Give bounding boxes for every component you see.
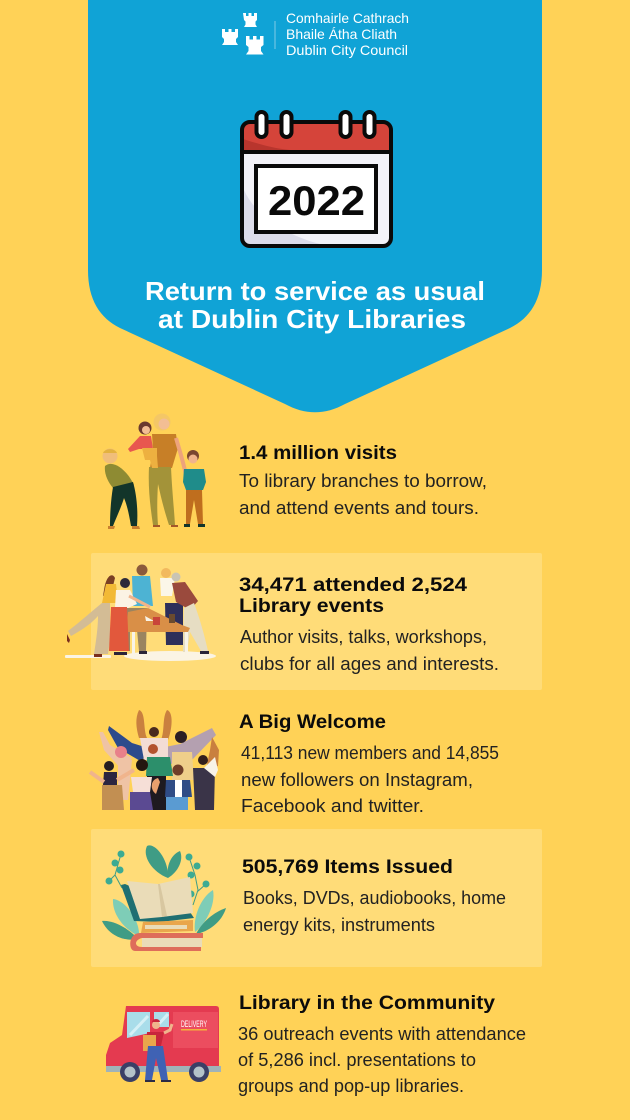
text: items issued: 505,769 Items Issued xyxy=(242,857,453,878)
text: library in the community: of 5,286 incl. presentations to xyxy=(238,1050,476,1070)
illustration: delivery van: DELIVERY xyxy=(181,1019,207,1029)
standing woman in yellow xyxy=(103,575,115,596)
text: library events xyxy=(239,575,499,674)
logo divider xyxy=(274,21,276,49)
title xyxy=(145,276,485,334)
text: a big welcome: new followers on Instagram, xyxy=(241,770,473,790)
illustration: cheering crowd xyxy=(90,710,219,810)
panel: blue header xyxy=(88,0,542,412)
woman in white xyxy=(161,568,171,578)
text: library events: clubs for all ages and interests. xyxy=(240,654,499,674)
text: library in the community: Library in the Community xyxy=(239,993,495,1014)
title: at Dublin City Libraries xyxy=(158,304,466,334)
old man xyxy=(102,448,118,464)
title: Return to service as usual xyxy=(145,276,485,306)
logo text: Bhaile Átha Cliath xyxy=(286,26,397,42)
table xyxy=(126,608,190,632)
illustration: books and plants xyxy=(102,845,226,951)
logo text: Dublin City Council xyxy=(286,42,408,58)
text: 1.4 million visits xyxy=(239,443,487,518)
text: items issued: Books, DVDs, audiobooks, home xyxy=(243,888,506,908)
text: items issued xyxy=(242,857,506,935)
text: a big welcome: Facebook and twitter. xyxy=(241,796,424,816)
boy xyxy=(187,450,199,462)
logo: Dublin City Council xyxy=(222,10,409,58)
text: library events: Author visits, talks, workshops, xyxy=(240,627,487,647)
illustration: people at table xyxy=(65,564,216,661)
man in blue xyxy=(136,564,148,576)
text: library in the community: groups and pop-up libraries. xyxy=(238,1076,464,1096)
logo text: Comhairle Cathrach xyxy=(286,10,409,26)
woman in red skirt xyxy=(120,578,130,588)
icon: calendar 2022: 2022 xyxy=(268,177,365,224)
icon: three castles xyxy=(222,13,264,54)
text: 1.4 million visits: To library branches to borrow, xyxy=(239,471,487,491)
text: a big welcome: A Big Welcome xyxy=(239,712,386,733)
text: a big welcome: 41,113 new members and 14,855 xyxy=(241,743,499,763)
illustration: family visiting xyxy=(102,414,206,529)
text: items issued: energy kits, instruments xyxy=(243,915,435,935)
text: 1.4 million visits: 1.4 million visits xyxy=(239,443,397,464)
icon: calendar 2022 xyxy=(242,112,391,246)
text: a big welcome xyxy=(239,712,499,816)
illustration: delivery van xyxy=(106,1006,221,1082)
logo text xyxy=(286,10,409,58)
text: library in the community: 36 outreach events with attendance xyxy=(238,1024,526,1044)
navy trousers xyxy=(165,603,183,645)
panel: library events band xyxy=(91,553,542,690)
text: 1.4 million visits: and attend events and tours. xyxy=(239,498,479,518)
text: library events: Library events xyxy=(239,596,384,617)
text: library events: 34,471 attended 2,524 xyxy=(239,575,468,596)
panel: items issued band xyxy=(91,829,542,967)
child held xyxy=(138,422,152,434)
woman xyxy=(154,414,170,430)
text: library in the community xyxy=(238,993,526,1096)
man in brown xyxy=(172,572,180,582)
